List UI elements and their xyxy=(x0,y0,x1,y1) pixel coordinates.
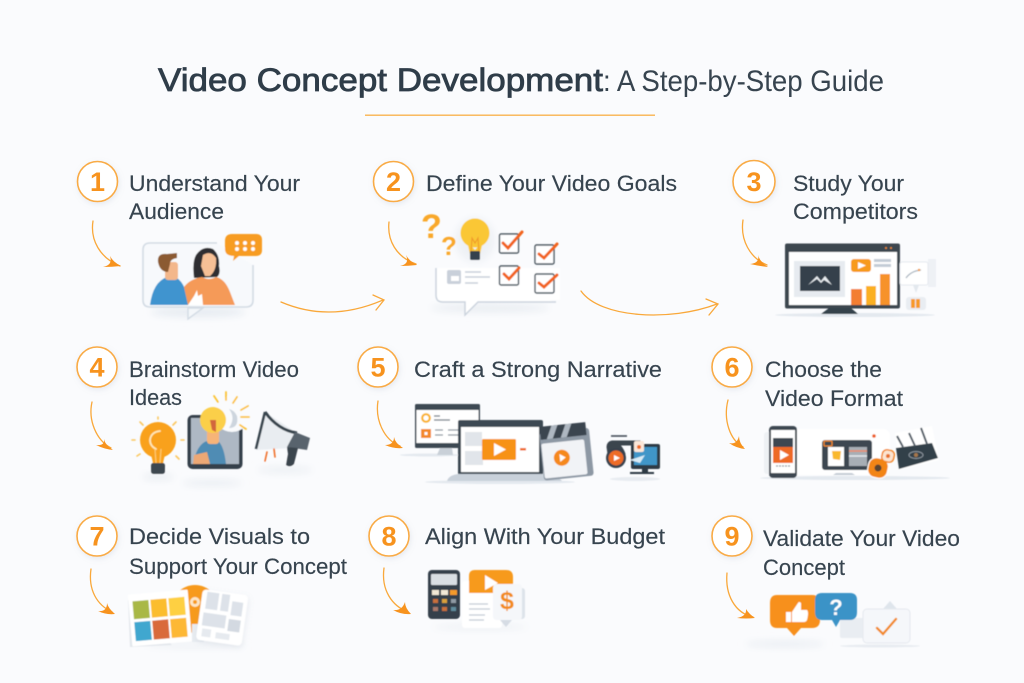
number badge 9 xyxy=(712,516,752,556)
heading 6: Choose the xyxy=(765,357,882,382)
icon: video production set xyxy=(400,404,594,484)
heading 8: Align With Your Budget xyxy=(425,524,665,549)
heading 5: Craft a Strong Narrative xyxy=(414,357,662,382)
number badge 7 xyxy=(77,516,117,556)
arrow 8 xyxy=(384,568,411,614)
arrow 1 xyxy=(92,221,121,267)
heading 4: Brainstorm Video xyxy=(129,357,299,382)
number badge 2: 2 xyxy=(386,167,401,197)
icon: video camera xyxy=(606,436,660,481)
icon: budget calculator and invoice: $ xyxy=(500,587,514,615)
step 9 xyxy=(712,516,960,648)
arrow 4 xyxy=(91,402,113,450)
title: Video Concept Development xyxy=(158,62,603,98)
number badge 9: 9 xyxy=(724,522,740,552)
heading 7 xyxy=(129,524,347,579)
icon: tablet person idea xyxy=(182,392,250,486)
arrow 7 xyxy=(90,569,115,614)
heading 4: Ideas xyxy=(129,385,182,410)
number badge 8: 8 xyxy=(381,522,397,552)
heading 1: Understand Your xyxy=(129,171,300,196)
step 3 xyxy=(733,160,936,317)
step 4 xyxy=(77,347,313,486)
number badge 1 xyxy=(78,162,118,202)
number badge 3 xyxy=(733,160,775,202)
number badge 6: 6 xyxy=(724,352,740,382)
icon: goals checklist xyxy=(421,208,560,315)
icon: validation feedback bubbles xyxy=(745,593,920,648)
arrow 6 xyxy=(726,400,745,449)
title: : A Step-by-Step Guide xyxy=(603,65,884,98)
step 8 xyxy=(369,516,665,629)
icon: audience video call xyxy=(143,234,262,319)
icon: goals checklist: ? xyxy=(421,208,442,246)
number badge 4 xyxy=(77,347,117,387)
step 6 xyxy=(712,347,950,480)
heading 4 xyxy=(129,357,299,410)
connector arrow 2 to 3 xyxy=(581,291,718,315)
heading 9 xyxy=(763,526,960,580)
arrow 2 xyxy=(389,222,417,266)
arrow 5 xyxy=(377,401,403,448)
heading 6: Video Format xyxy=(765,386,903,411)
step 5 xyxy=(358,347,662,484)
heading 1: Audience xyxy=(129,199,224,224)
number badge 6 xyxy=(712,347,752,387)
heading 3: Study Your xyxy=(793,171,904,196)
icon: budget calculator and invoice xyxy=(428,570,528,629)
step 1 xyxy=(78,162,300,319)
heading 3 xyxy=(793,171,918,224)
icon: competitor dashboard xyxy=(775,244,936,317)
number badge 4: 4 xyxy=(89,352,105,382)
number badge 3: 3 xyxy=(746,167,762,197)
connector arrow 1 to 2 xyxy=(281,295,384,312)
heading 9: Validate Your Video xyxy=(763,526,960,551)
heading 7: Decide Visuals to xyxy=(129,524,310,549)
icon: validation feedback bubbles: ? xyxy=(829,595,843,620)
title xyxy=(158,62,884,98)
icon: goals checklist: ? xyxy=(441,231,457,261)
heading 9: Concept xyxy=(763,555,845,580)
heading 7: Support Your Concept xyxy=(129,554,347,579)
icon: format options xyxy=(760,426,950,480)
heading 3: Competitors xyxy=(793,199,918,224)
heading 6 xyxy=(765,357,903,411)
step 2 xyxy=(374,162,677,315)
number badge 5 xyxy=(358,347,398,387)
step 7 xyxy=(77,516,347,647)
number badge 1: 1 xyxy=(90,167,105,197)
arrow 3 xyxy=(742,220,768,267)
arrow 9 xyxy=(727,573,755,618)
icon: brainstorm bulb xyxy=(132,417,184,480)
number badge 8 xyxy=(369,516,409,556)
number badge 2 xyxy=(374,162,414,202)
heading 2: Define Your Video Goals xyxy=(426,171,677,196)
heading 1 xyxy=(129,171,300,224)
number badge 7: 7 xyxy=(89,522,105,552)
icon: visual mood boards xyxy=(128,585,248,647)
number badge 5: 5 xyxy=(370,352,386,382)
icon: megaphone xyxy=(256,412,313,473)
